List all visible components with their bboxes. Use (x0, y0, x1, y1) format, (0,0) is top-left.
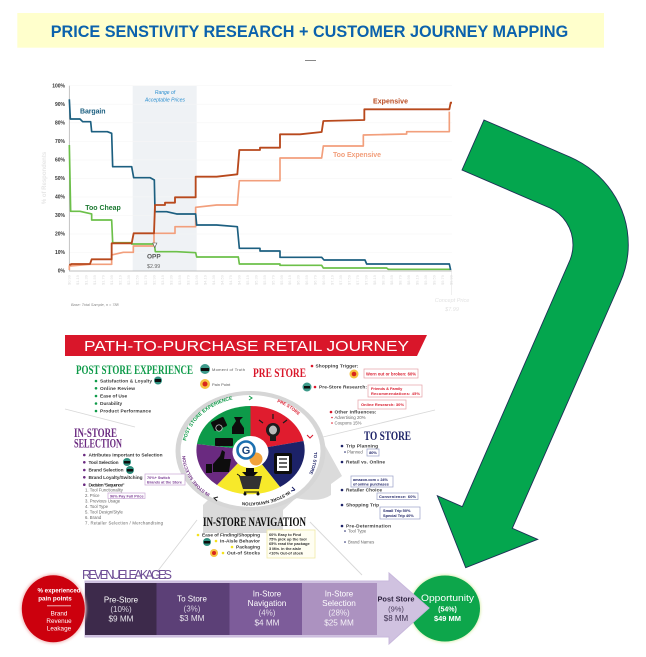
legend: moment of truth and pain point (200, 364, 245, 389)
legend: moment of truth and pain point: Moment of Truth (212, 367, 245, 372)
brand revenue leakage circle (20, 574, 86, 644)
callout: navigation stats: 65% read the package (269, 541, 310, 546)
segment: in-store selection (302, 583, 377, 635)
x axis price labels: $6.19 (287, 274, 292, 285)
divider strokes (65, 409, 435, 575)
x axis price labels: $5.39 (253, 274, 258, 285)
icon: large green journey arrow (437, 120, 628, 568)
icon: light bulb (259, 414, 287, 441)
final arrow: post store (85, 573, 481, 644)
y axis labels: 30% (55, 213, 66, 219)
segment: in-store selection: $25 MM (324, 618, 354, 628)
segment: pre-store: (10%) (110, 605, 132, 614)
x axis price labels: $1.79 (100, 274, 106, 285)
x axis price labels: $4.59 (219, 274, 224, 285)
callout: online research (358, 400, 406, 409)
x axis price labels: $1.39 (84, 274, 88, 285)
label: too cheap: Too Cheap (85, 205, 121, 212)
callout: friends and family: Friends & Family (371, 386, 403, 391)
x axis price labels: $4.79 (228, 274, 233, 285)
wheel ring labels: IN-STORE SELECTION (182, 456, 210, 496)
x axis price labels: $7.19 (330, 274, 335, 285)
x axis price labels: $8.99 (406, 274, 411, 285)
opportunity circle (410, 576, 480, 642)
panel: to store: TO STORE (364, 428, 411, 443)
text: opportunity: Opportunity (421, 593, 475, 603)
panel: in-store navigation: In-Aisle Behavior (220, 539, 260, 545)
journey banner (65, 335, 427, 356)
panel: to store: Retailer Choice (346, 488, 382, 494)
callout: navigation stats: 75% pick up the tool (269, 537, 307, 542)
brand logo (232, 436, 268, 468)
x axis price labels: $7.79 (355, 274, 360, 285)
x axis price labels: $1.19 (75, 274, 80, 285)
brand revenue leakage circle: % experienced (38, 588, 81, 594)
panel: in-store selection (74, 426, 185, 526)
sector: pre store (250, 406, 304, 450)
base note: Base: Total Sample, n = 788 (71, 303, 120, 307)
x axis price labels: $3.19 (160, 274, 165, 285)
x axis price labels: $7.59 (347, 274, 352, 285)
segment text: post store (378, 594, 414, 623)
segment: to store: $3 MM (179, 614, 205, 623)
panel: post store experience: Online Review (100, 386, 135, 392)
y axis labels: 70% (55, 139, 66, 145)
segment: in-store selection: (28%) (328, 608, 350, 618)
x axis price labels: $3.59 (177, 274, 182, 285)
y axis labels: 20% (55, 232, 66, 238)
x axis price labels: $9.39 (423, 274, 428, 285)
x axis price labels: $3.99 (194, 274, 199, 285)
callout: navigation stats: 3 Min. in the aisle (269, 546, 302, 551)
panel: in-store selection: SELECTION (74, 436, 122, 450)
wheel ring labels: IN-STORE NAVIGATION (242, 491, 290, 506)
panel: in-store selection: IN-STORE (74, 426, 117, 440)
segment: pre-store: Pre-Store (104, 596, 139, 604)
x axis price labels (66, 274, 454, 285)
x axis price labels: $6.79 (313, 274, 318, 285)
callout: planned: 80% (369, 450, 377, 455)
wheel ring labels (182, 396, 318, 506)
panel: in-store navigation: Out-of Stocks (227, 551, 260, 557)
path-to-purchase journey infographic (19, 335, 482, 645)
head silhouette (203, 408, 342, 533)
callout: trip type (380, 507, 420, 519)
x axis price labels: $9.59 (432, 274, 437, 285)
x axis price labels: $1.59 (92, 274, 97, 285)
panel: pre store: Coupons 15% (334, 420, 362, 426)
callout: worn out (364, 369, 418, 378)
wheel ring labels: TO STORE (309, 452, 318, 475)
x axis price labels: $5.59 (262, 274, 267, 285)
chart curves (69, 99, 452, 270)
y axis labels (52, 83, 66, 275)
curve: bargain (69, 99, 451, 270)
price sensitivity line chart (42, 83, 469, 313)
journey banner: PATH-TO-PURCHASE RETAIL JOURNEY (84, 339, 409, 355)
panel: in-store selection: Decision "Sequence" (88, 482, 124, 488)
title banner: PRICE SENSTIVITY RESEARCH + CUSTOMER JOURNEY MAPPING (51, 22, 568, 41)
curve: expensive (69, 103, 452, 265)
panel: to store: Shopping Trip (346, 503, 379, 509)
icon: camera, spray and scraper (211, 417, 244, 446)
title banner (17, 13, 604, 48)
x axis price labels: $6.39 (296, 274, 301, 285)
callout: switch brands: 70%+ Switch (147, 476, 171, 480)
x axis price labels: $4.99 (236, 274, 241, 285)
x axis price labels: $5.79 (270, 274, 275, 285)
sector: in-store selection (196, 444, 250, 485)
sector: post store (197, 406, 250, 450)
panel: in-store selection: 5. Tool Design/Style (85, 510, 124, 514)
panel: in-store selection: Attributes Important to Selection (88, 453, 163, 459)
y axis title: % of Respondents (42, 151, 48, 204)
x axis price labels: $3.39 (168, 274, 173, 285)
revenue leakage funnel (20, 573, 481, 644)
x axis price labels: $9.19 (415, 274, 420, 285)
sector: to store (250, 441, 305, 487)
text: opportunity: (54%) (438, 606, 457, 614)
label: bargain: Bargain (80, 108, 106, 115)
x axis price labels: $2.99 (151, 274, 156, 285)
callout: worn out: Worn out or broken: 60% (366, 371, 416, 376)
x axis price labels: $2.19 (117, 274, 122, 285)
panel: to store (341, 428, 420, 545)
panel: post store experience (76, 362, 193, 415)
segment: to store: (3%) (184, 604, 201, 614)
curve: too expensive (69, 112, 449, 270)
icon: shopping cart (237, 468, 262, 496)
panel: pre store: Pre-Store Research: (319, 385, 367, 391)
sector: in-store navigation (217, 450, 280, 494)
x axis price labels: $9.79 (440, 274, 445, 285)
x axis price labels: $0.99 (66, 274, 72, 285)
callout: convenience: Convenience: 60% (379, 494, 417, 499)
optimal price point marker: $2.99 (147, 264, 160, 270)
y axis labels: 50% (55, 176, 66, 182)
y axis labels: 40% (55, 195, 66, 201)
label: expensive: Expensive (373, 98, 408, 106)
callout: full price: 96% Pay Full Price (110, 494, 144, 498)
callout: navigation stats: 60% Easy to Find (269, 532, 302, 537)
panel: in-store navigation: IN-STORE NAVIGATION (203, 514, 306, 529)
panel: in-store selection: 4. Tool Type (85, 504, 109, 509)
icon: thumbs up (206, 450, 231, 473)
callout: amazon share: amazon.com = 24% (353, 478, 389, 482)
x axis price labels: $6.99 (321, 274, 326, 285)
segment: pre-store: $9 MM (108, 614, 134, 624)
x axis price labels: $7.39 (338, 274, 343, 285)
x axis price labels: $8.59 (389, 274, 394, 285)
callout: friends and family: Recommendations: 45% (371, 391, 421, 396)
callout: navigation stats (267, 530, 315, 558)
panel: pre store (253, 364, 422, 426)
segment: in-store selection: Selection (322, 599, 356, 608)
panel: in-store selection: Brand Loyalty/Switching (88, 475, 143, 481)
panel: to store: Brand Names (348, 540, 374, 545)
concept price note: Concept Price (435, 298, 469, 304)
callout: switch brands: Brands at the Store (147, 480, 182, 484)
segment: in-store selection: In-Store (325, 590, 354, 598)
optimal price point marker (147, 243, 161, 270)
panel: post store experience: Ease of Use (100, 394, 128, 400)
brand revenue leakage circle: pain points (38, 596, 72, 602)
segment: to store: To Store (177, 594, 207, 604)
optimal price point marker: OPP (147, 254, 161, 261)
x axis price labels: $8.79 (398, 274, 403, 285)
text: opportunity (421, 593, 475, 623)
panel: in-store navigation (197, 514, 315, 558)
callout: navigation stats: <10% Out-of stock (269, 550, 304, 555)
callout: amazon share (351, 476, 393, 487)
panel: in-store selection: Tool Selection (88, 460, 119, 466)
acceptable price range band: Range of (155, 90, 176, 96)
brand revenue leakage circle: Revenue (46, 618, 72, 625)
callout: switch brands (145, 474, 185, 485)
y axis labels: 60% (55, 158, 66, 164)
panel: in-store selection: 3. Previous Usage (85, 498, 121, 504)
panel: in-store selection: 2. Price (85, 493, 100, 498)
heading: revenue leakages: REVENUE LEAKAGES (82, 568, 172, 582)
panel: post store experience: POST STORE EXPERIENCE (76, 362, 193, 377)
panel: pre store: Other Influences: (334, 410, 377, 416)
curve: too cheap (69, 145, 451, 269)
panel: in-store navigation: Ease of Finding/Shopping (202, 533, 260, 539)
segment: in-store navigation: $4 MM (254, 618, 280, 628)
panel: to store: Retail vs. Online (346, 460, 385, 466)
segment: pre-store (85, 583, 156, 635)
segment text: post store: $8 MM (384, 614, 409, 623)
x axis price labels: $5.19 (245, 274, 250, 285)
y axis labels: 0% (58, 269, 66, 275)
acceptable price range band: Acceptable Prices (144, 98, 186, 104)
panel: post store experience: Durability (100, 401, 122, 407)
y axis labels: 80% (55, 120, 66, 126)
callout: online research: Online Research: 30% (361, 402, 404, 407)
panel: to store: Tool Type (348, 529, 367, 534)
x axis price labels: $8.19 (372, 274, 377, 285)
ring chevrons (214, 396, 313, 501)
panel: post store experience: Product Performance (100, 409, 151, 415)
y axis labels: 90% (55, 102, 66, 108)
segment: in-store navigation: (4%) (259, 608, 276, 618)
x axis price labels: $2.79 (143, 274, 148, 285)
x axis price labels: $9.99 (449, 274, 454, 285)
panel: in-store selection: 1. Tool Functionality (85, 488, 124, 492)
y axis labels: 100% (52, 83, 66, 89)
segment text: post store: Post Store (378, 594, 414, 604)
x axis price labels: $4.39 (211, 274, 216, 285)
acceptable price range band (133, 86, 197, 271)
callout: trip type: Small Trip 50% (383, 508, 411, 513)
x axis price labels: $5.99 (279, 274, 284, 285)
concept price note (435, 298, 469, 313)
x axis price labels: $7.99 (364, 274, 369, 285)
segment: in-store navigation: In-Store (253, 590, 282, 598)
x axis price labels: $6.59 (304, 274, 309, 285)
x axis price labels: $3.79 (185, 274, 190, 285)
y axis labels: 10% (55, 250, 66, 256)
icon: checklist (274, 453, 292, 474)
brand revenue leakage circle: Leakage (47, 626, 72, 632)
panel: pre store: Shopping Trigger: (316, 364, 359, 370)
callout: amazon share: of online purchases (353, 482, 389, 486)
panel: to store: Pre-Determination (346, 524, 391, 530)
panel: in-store selection: 6. Brand (85, 515, 102, 520)
segment: in-store navigation (230, 583, 302, 635)
panel: to store: Trip Planning (346, 444, 378, 450)
panel: pre store: Advertising 20% (334, 415, 366, 420)
segment: in-store navigation: Navigation (248, 599, 287, 608)
label: too expensive: Too Expensive (333, 152, 381, 159)
callout: friends and family (368, 385, 422, 397)
panel: post store experience: Satisfaction & Loyalty (100, 379, 152, 385)
x axis price labels: $2.39 (126, 274, 131, 285)
x axis price labels: $8.39 (381, 274, 386, 285)
panel: pre store: PRE STORE (253, 365, 306, 380)
x axis price labels: $1.99 (109, 274, 114, 285)
x axis price labels: $4.19 (202, 274, 207, 285)
journey wheel (176, 391, 326, 507)
panel: in-store selection: 7. Retailer Selection / Merchandising (85, 520, 164, 526)
wheel ring labels: POST STORE EXPERIENCE (182, 396, 232, 441)
panel: in-store selection: Brand Selection (88, 468, 124, 474)
panel: in-store navigation: Packaging (236, 545, 260, 551)
legend: moment of truth and pain point: Pain Point (212, 382, 231, 387)
segment text: post store: (9%) (388, 604, 404, 614)
x axis price labels: $2.59 (134, 274, 139, 285)
panel: to store: Planned (347, 450, 363, 455)
callout: trip type: Special Trip 40% (383, 513, 414, 518)
wheel ring labels: PRE STORE (277, 399, 300, 416)
brand revenue leakage circle: Brand (51, 610, 68, 618)
segment: to store (156, 583, 230, 635)
concept price note: $7.99 (444, 307, 459, 313)
brand logo: G (242, 445, 250, 457)
text: opportunity: $49 MM (434, 614, 461, 623)
